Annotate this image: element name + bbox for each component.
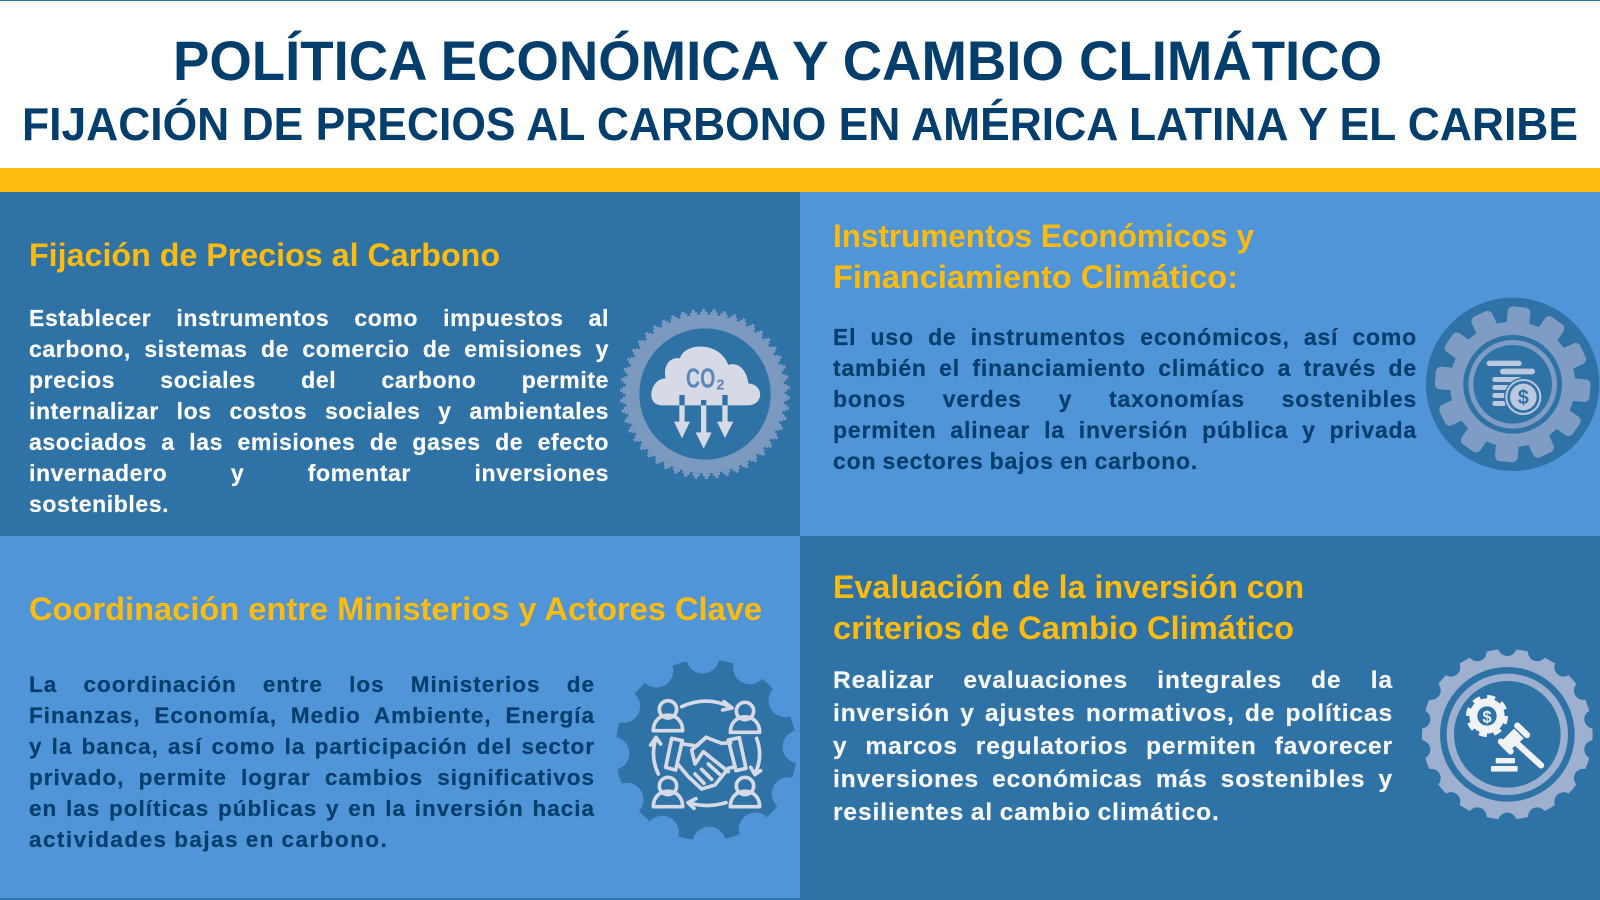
text block: economic instruments: El uso de instrumentos económicos, así como [833,324,1417,350]
heading: coordination: Coordinación entre Ministerios y Actores Clave [29,591,762,627]
text block: economic instruments: también el financiamiento climático a través de [833,355,1417,381]
icon: CO2 cloud badge: 2 [716,377,724,393]
yellow divider band [0,168,1600,192]
text block: carbon pricing: Establecer instrumentos como impuestos al [29,305,609,331]
heading: climate investment evaluation: criterios de Cambio Climático [833,610,1294,646]
text block: climate investment evaluation: inversión y ajustes normativos, de políticas [833,700,1393,727]
text block: carbon pricing: internalizar los costos sociales y ambientales [29,398,609,424]
text block: carbon pricing: precios sociales del carbono permite [29,367,609,393]
text block: climate investment evaluation: Realizar evaluaciones integrales de la [833,667,1393,694]
text block: economic instruments [833,324,1417,474]
text block: carbon pricing: carbono, sistemas de comercio de emisiones y [29,336,609,362]
icon: CO2 cloud badge [620,309,790,479]
heading: economic instruments: Financiamiento Climático: [833,259,1238,295]
text block: climate investment evaluation [833,667,1393,826]
title [22,29,1578,150]
text block: carbon pricing: invernadero y fomentar inversiones [29,460,609,486]
panel: climate investment evaluation [800,536,1600,900]
heading: climate investment evaluation: Evaluación de la inversión con [833,569,1304,605]
title: POLÍTICA ECONÓMICA Y CAMBIO CLIMÁTICO [173,29,1382,92]
icon: gavel gear [1422,650,1593,820]
text block: coordination: La coordinación entre los Ministerios de [29,672,595,697]
text block: coordination: en las políticas públicas y en la inversión hacia [29,796,595,821]
header band [0,0,1600,168]
text block: coordination: actividades bajas en carbono. [29,827,388,852]
panel: economic instruments [800,192,1600,536]
heading: economic instruments: Instrumentos Económicos y [833,218,1254,254]
title: FIJACIÓN DE PRECIOS AL CARBONO EN AMÉRICA LATINA Y EL CARIBE [22,98,1578,150]
icon: gear with coins: $ [1518,387,1529,409]
icon: gavel gear: $ [1482,707,1492,726]
text block: economic instruments: bonos verdes y taxonomías sostenibles [833,386,1417,412]
text block: climate investment evaluation: inversiones económicas más sostenibles y [833,766,1393,793]
heading: climate investment evaluation [833,569,1304,646]
heading: economic instruments [833,218,1254,295]
icon: CO2 cloud badge: CO [686,362,715,393]
text block: climate investment evaluation: resilientes al cambio climático. [833,799,1220,826]
text block: economic instruments: con sectores bajos en carbono. [833,448,1198,474]
text block: coordination: y la banca, así como la participación del sector [29,734,595,759]
text block: carbon pricing: asociados a las emisiones de gases de efecto [29,429,609,455]
panel: coordination [0,536,800,900]
text block: coordination [29,672,595,852]
text block: coordination: privado, permite lograr cambios significativos [29,765,595,790]
icon: handshake gear [616,660,796,840]
text block: economic instruments: permiten alinear la inversión pública y privada [833,417,1417,443]
text block: coordination: Finanzas, Economía, Medio Ambiente, Energía [29,703,595,728]
text block: carbon pricing: sostenibles. [29,491,169,517]
text block: climate investment evaluation: y marcos regulatorios permiten favorecer [833,733,1393,760]
text block: carbon pricing [29,305,609,517]
heading: carbon pricing: Fijación de Precios al Carbono [29,237,500,273]
panel: carbon pricing [0,192,800,536]
icon: gear with coins [1426,298,1600,471]
